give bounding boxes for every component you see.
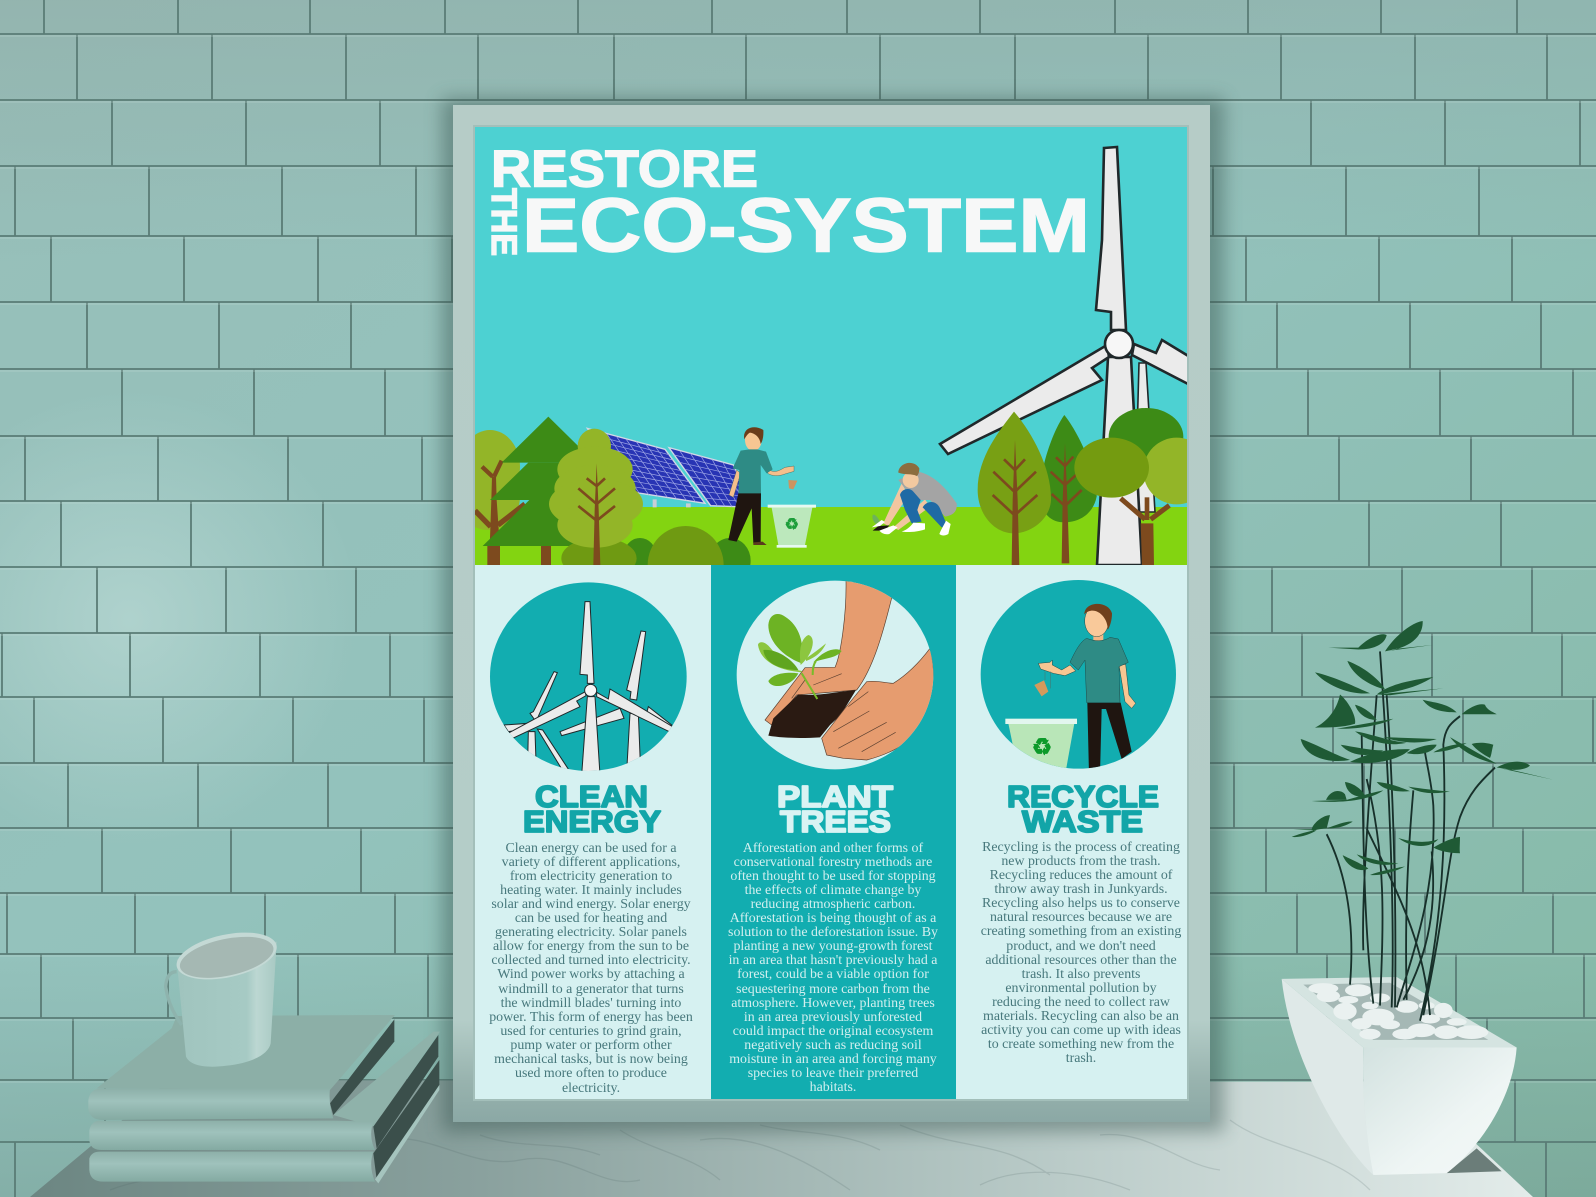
body text: recycle waste: product, and we don't need: [1006, 939, 1156, 954]
body text: plant trees: reducing atmospheric carbon.: [751, 897, 915, 912]
sky: [475, 127, 1187, 507]
icon: wind turbines in circle: [490, 582, 687, 775]
heading: recycle waste: [1007, 779, 1159, 839]
heading: clean energy: [523, 779, 661, 839]
left group: panels, trees, man, bin: [475, 416, 816, 565]
title line: restore: RESTORE: [491, 140, 758, 198]
body text: clean energy: [489, 841, 693, 1096]
body text: plant trees: in an area previously unforested: [744, 1010, 922, 1025]
body text: clean energy: variety of different applications,: [502, 855, 680, 870]
body text: plant trees: species to leave their preferred: [748, 1066, 918, 1081]
body text: plant trees: atmosphere. However, planting trees: [731, 996, 935, 1011]
crouching gardener: [872, 463, 957, 535]
top book: [88, 1015, 395, 1120]
heading: plant trees: PLANT: [777, 779, 893, 814]
plant leaves: [1292, 621, 1553, 875]
title line: eco-system: ECO-SYSTEM: [522, 184, 1090, 268]
mug: [166, 925, 281, 1067]
body text: clean energy: pump water or perform other: [510, 1038, 672, 1053]
body text: clean energy: windmill to a generator that turns: [498, 982, 684, 997]
tree: pine: [482, 416, 578, 565]
poster: [457, 125, 1210, 1101]
heading: recycle waste: WASTE: [1022, 804, 1143, 839]
body text: recycle waste: to create something new from the: [988, 1037, 1174, 1052]
body text: plant trees: forest, could be a viable option for: [737, 967, 929, 982]
body text: recycle waste: creating something from an existing: [981, 924, 1181, 939]
man holding cup: [728, 427, 797, 545]
body text: plant trees: in an area that hasn't previously had a: [729, 953, 937, 968]
body text: clean energy: heating water. It mainly includes: [500, 883, 682, 898]
planter: [1282, 977, 1517, 1175]
body text: recycle waste: Recycling is the process of creating: [982, 840, 1180, 855]
icon: man dropping cup into bin in circle: ♻: [1032, 734, 1052, 760]
middle book: [89, 1032, 440, 1150]
body text: recycle waste: natural resources because we are: [990, 910, 1172, 925]
body text: clean energy: generating electricity. Solar panels: [495, 925, 687, 940]
heading: clean energy: CLEAN: [535, 779, 648, 814]
panel: recycle waste: [956, 565, 1187, 1099]
icon: solar panels: [587, 428, 753, 507]
bottom book: [89, 1060, 439, 1183]
body text: plant trees: habitats.: [810, 1080, 856, 1095]
body text: clean energy: collected and turned into electricity.: [491, 953, 691, 968]
heading: recycle waste: RECYCLE: [1007, 779, 1159, 814]
body text: plant trees: often thought to be used for stopping: [730, 869, 936, 884]
tree: light left: [475, 430, 526, 539]
body text: plant trees: [728, 841, 938, 1095]
tree: olive pointed: [978, 412, 1051, 565]
frame shadow: [442, 98, 1224, 1132]
ground: [475, 507, 1187, 565]
body text: recycle waste: throw away trash in Junkyards.: [994, 882, 1168, 897]
tree: round cluster: [1074, 408, 1187, 565]
body text: clean energy: used for centuries to grind grain,: [500, 1024, 682, 1039]
body text: clean energy: mechanical tasks, but is now being: [494, 1052, 688, 1067]
body text: plant trees: solution to the deforestation issue. By: [728, 925, 938, 940]
icon: recycling bin: [768, 505, 816, 548]
heading: clean energy: ENERGY: [523, 804, 661, 839]
planter shadow: [1447, 1148, 1502, 1173]
title line: the (vertical): THE: [484, 188, 523, 256]
body text: clean energy: from electricity generation to: [510, 869, 672, 884]
body text: clean energy: allow for energy from the sun to be: [493, 939, 689, 954]
body text: recycle waste: activity you can come up with ideas: [981, 1023, 1181, 1038]
tree: light round front: [549, 429, 643, 565]
body text: clean energy: solar and wind energy. Solar energy: [491, 897, 691, 912]
body text: plant trees: negatively such as reducing soil: [744, 1038, 922, 1053]
body text: clean energy: power. This form of energy has been: [489, 1010, 693, 1025]
body text: recycle waste: new products from the trash.: [1001, 854, 1161, 869]
stacked books: [88, 1015, 440, 1183]
body text: recycle waste: Recycling reduces the amount of: [990, 868, 1173, 883]
right group: gardener and trees: [872, 408, 1210, 565]
icon: hands planting seedling in circle: [737, 580, 934, 769]
body text: recycle waste: trash. It also prevents: [1022, 967, 1140, 982]
marble counter: [30, 1080, 1533, 1197]
panel: clean energy: [475, 565, 711, 1099]
body text: clean energy: can be used for heating and: [515, 911, 667, 926]
body text: recycle waste: materials. Recycling can also be an: [983, 1009, 1179, 1024]
body text: recycle waste: [981, 840, 1181, 1066]
potted plant: [1282, 621, 1553, 1175]
panel: plant trees: [711, 565, 956, 1099]
heading: plant trees: [777, 779, 893, 839]
body text: clean energy: Wind power works by attaching a: [497, 967, 685, 982]
body text: plant trees: moisture in an area and forcing many: [729, 1052, 937, 1067]
body text: plant trees: planting a new young-growth forest: [733, 939, 933, 954]
icon: recycling bin: ♻: [784, 514, 799, 533]
poster inner mat edge: [473, 125, 1189, 1101]
icon: man dropping cup into bin in circle: [981, 580, 1176, 775]
body text: plant trees: conservational forestry methods are: [734, 855, 932, 870]
hero scene: sky, ground, trees, people, turbine: [475, 127, 1187, 565]
body text: recycle waste: additional resources other than the: [985, 953, 1177, 968]
body text: clean energy: used more often to produce: [515, 1066, 667, 1081]
body text: plant trees: Afforestation is being thought of as a: [730, 911, 936, 926]
body text: plant trees: the effects of climate change by: [745, 883, 921, 898]
body text: plant trees: Afforestation and other forms of: [743, 841, 924, 856]
heading: plant trees: TREES: [780, 804, 891, 839]
title: [484, 140, 1090, 268]
body text: recycle waste: environmental pollution by: [1005, 981, 1157, 996]
tree: dark pointed: [1040, 415, 1097, 563]
body text: plant trees: could impact the original ecosystem: [733, 1024, 933, 1039]
big wind turbine: [940, 147, 1190, 565]
poster frame: [453, 105, 1210, 1122]
body text: clean energy: Clean energy can be used for a: [506, 841, 676, 856]
body text: clean energy: electricity.: [562, 1081, 620, 1096]
body text: plant trees: sequestering more carbon from the: [736, 982, 930, 997]
body text: recycle waste: reducing the need to collect raw: [992, 995, 1170, 1010]
plant stems: [1327, 651, 1495, 1021]
body text: recycle waste: Recycling also helps us to conserve: [982, 896, 1180, 911]
body text: recycle waste: trash.: [1066, 1051, 1096, 1066]
pebbles: [1308, 983, 1488, 1039]
body text: clean energy: the windmill blades' turning into: [501, 996, 681, 1011]
bushes: [561, 526, 751, 565]
